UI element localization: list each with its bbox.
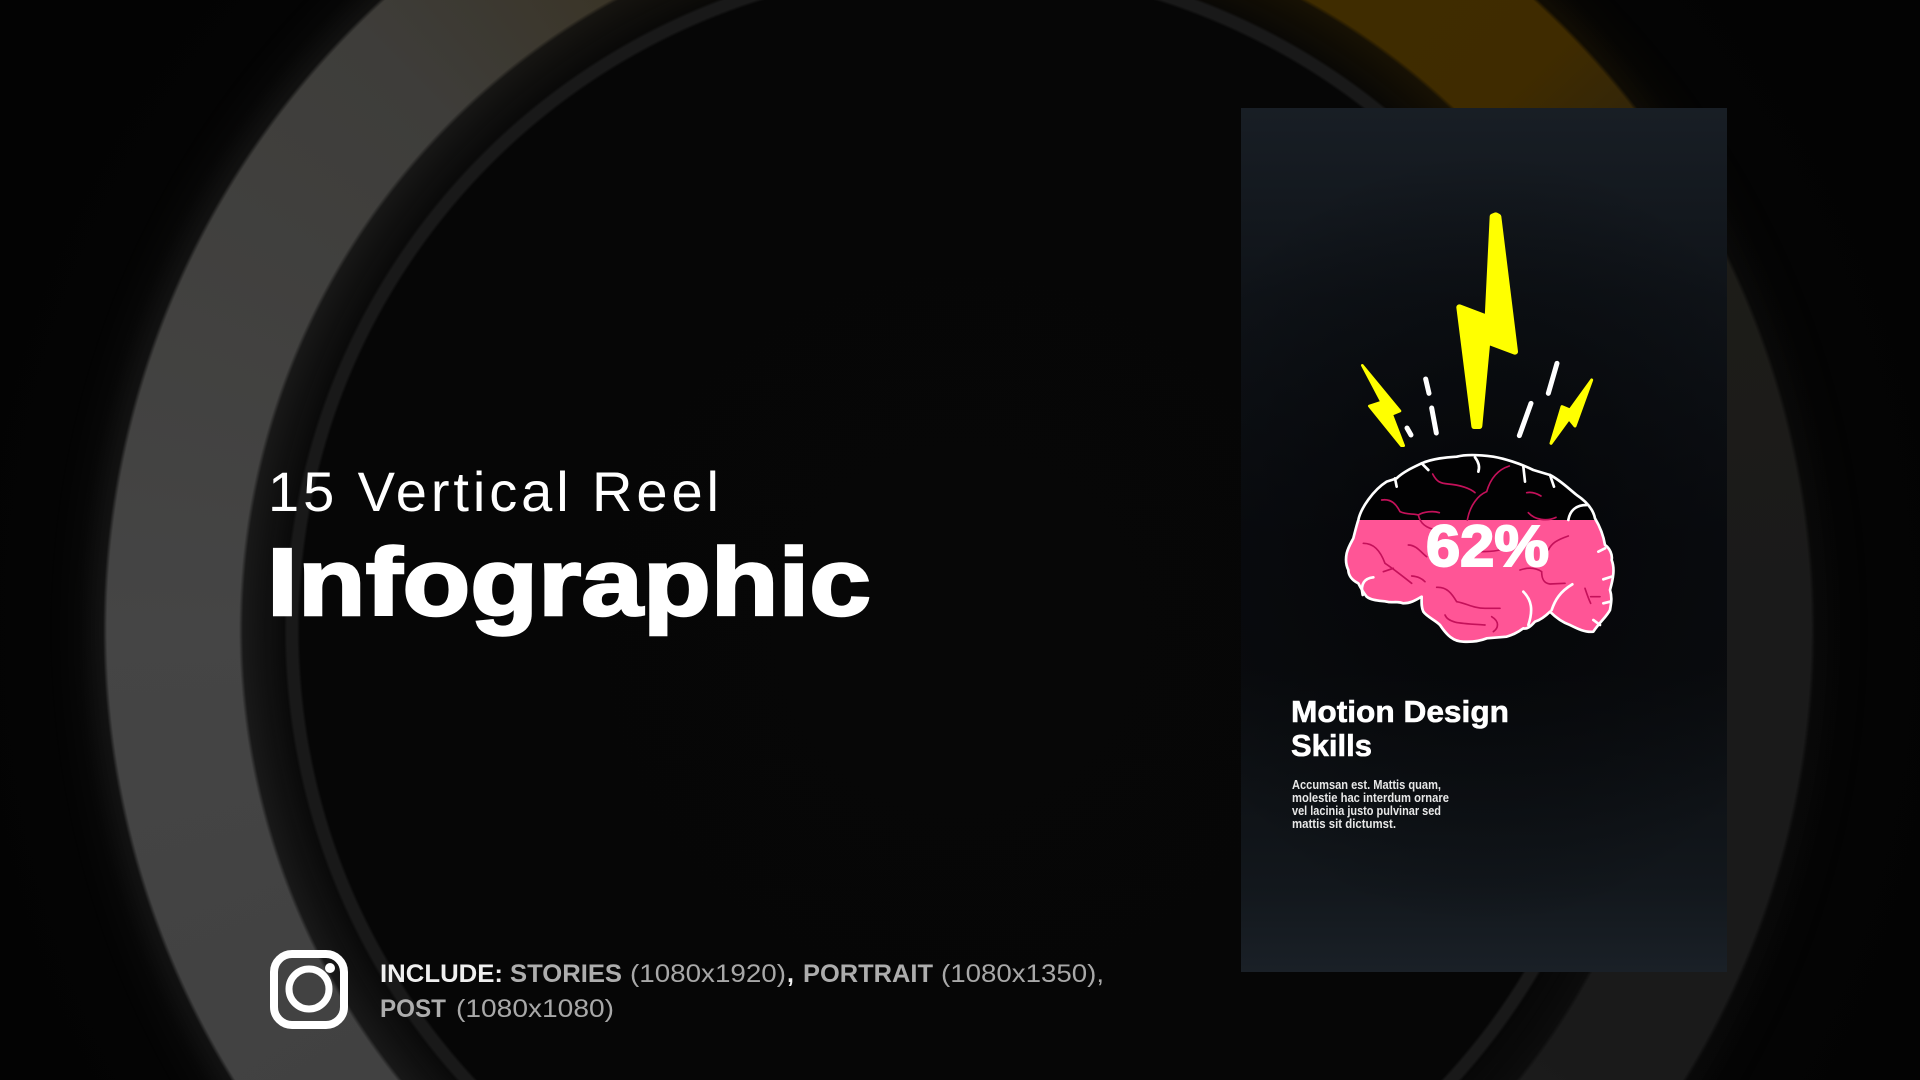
- card body text: [1292, 778, 1449, 831]
- text: included formats: (1080x1920): [630, 960, 786, 988]
- text: included formats: PORTRAIT: [803, 960, 933, 988]
- text: included formats: (1080x1350),: [941, 960, 1104, 988]
- icon: main lightning bolt: [1459, 215, 1515, 426]
- brain outline: [1346, 455, 1613, 642]
- card body text: Accumsan est. Mattis quam,: [1292, 778, 1441, 792]
- icon: white spark dashes: [1407, 363, 1557, 436]
- infographic: brain and lightning: [1346, 215, 1613, 642]
- brain pink fill: [1347, 520, 1612, 640]
- icon: instagram: [274, 954, 344, 1025]
- card heading: Motion Design Skills: Motion Design: [1291, 694, 1509, 729]
- icon: left lightning bolt: [1362, 365, 1404, 446]
- heading: Infographic: Infographic: [267, 529, 871, 636]
- text: included formats: ,: [787, 960, 794, 988]
- text: included formats: POST: [380, 995, 446, 1023]
- text: included formats: STORIES: [510, 960, 622, 988]
- panel: vertical reel card: [1241, 108, 1727, 972]
- card body text: mattis sit dictumst.: [1292, 817, 1396, 831]
- percentage: 62%: 62%: [1426, 514, 1549, 579]
- card body text: vel lacinia justo pulvinar sed: [1292, 804, 1441, 818]
- text: included formats: INCLUDE:: [380, 960, 503, 988]
- text: included formats: (1080x1080): [456, 995, 614, 1023]
- card heading: Motion Design Skills: [1291, 694, 1509, 763]
- brain veins: [1363, 466, 1600, 632]
- icon: right lightning bolt: [1551, 380, 1592, 443]
- text: included formats: [380, 960, 1104, 1023]
- title: 15 Vertical Reel: 15 Vertical Reel: [268, 460, 719, 523]
- card heading: Motion Design Skills: Skills: [1291, 728, 1372, 763]
- card body text: molestie hac interdum ornare: [1292, 791, 1449, 805]
- icon: brain: [1346, 455, 1613, 642]
